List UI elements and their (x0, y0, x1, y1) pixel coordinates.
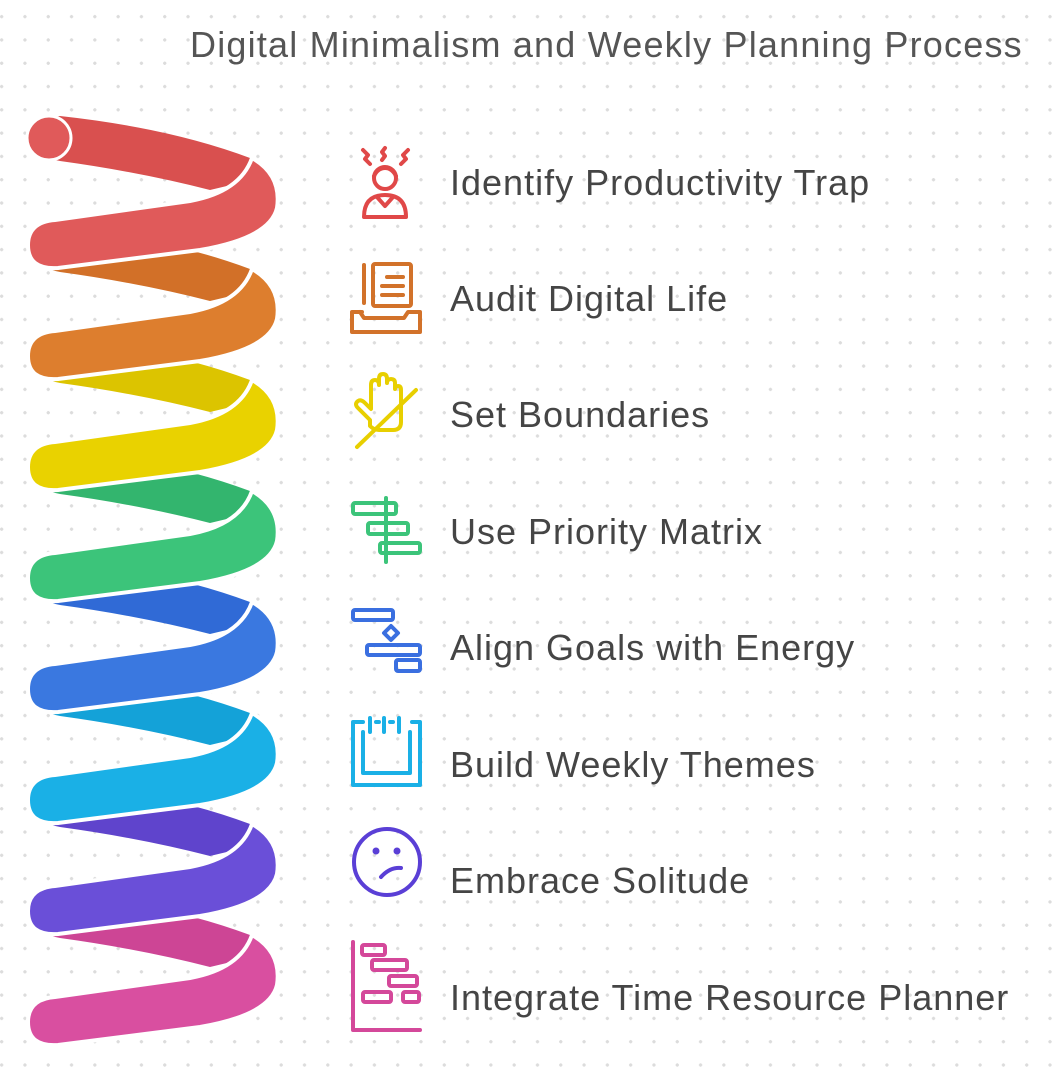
label 6: Build Weekly Themes (450, 744, 816, 785)
icon: stop hand (356, 374, 416, 447)
label 2: Audit Digital Life (450, 278, 728, 319)
label 3: Set Boundaries (450, 394, 710, 435)
start cap (27, 116, 71, 160)
icon: gantt green (353, 498, 420, 562)
label 8: Integrate Time Resource Planner (450, 977, 1009, 1018)
label 4: Use Priority Matrix (450, 511, 763, 552)
icon: gantt blue (353, 610, 420, 671)
icon: face (354, 829, 420, 895)
spiral chart (26, 116, 276, 1044)
icon: inbox document (352, 264, 420, 332)
icon: stressed person (363, 148, 408, 217)
label 7: Embrace Solitude (450, 860, 750, 901)
label 1: Identify Productivity Trap (450, 162, 870, 203)
title: Digital Minimalism and Weekly Planning Process (190, 24, 1023, 65)
back strands (40, 116, 257, 967)
icon: calendar (353, 718, 420, 785)
label 5: Align Goals with Energy (450, 627, 855, 668)
front strands (28, 158, 278, 1045)
icon: resource planner (353, 942, 420, 1030)
